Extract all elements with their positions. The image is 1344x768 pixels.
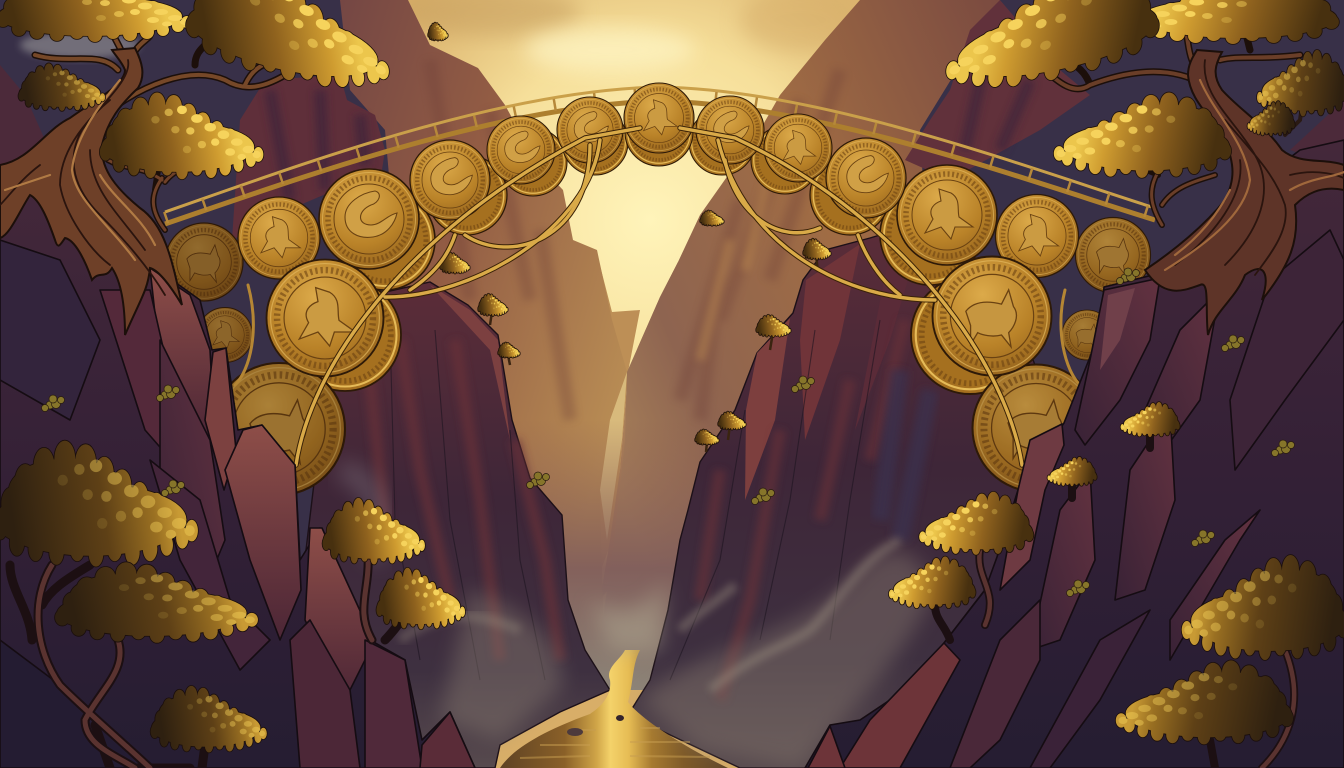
trunk mass [0,48,182,335]
trees: lower right grove [889,268,1344,768]
left foreground cliff [0,170,475,768]
coin: back layer of the bridge [289,98,1029,394]
bridge: top railing [165,87,1155,224]
thin bright slot between the far walls [600,372,627,540]
river [500,650,728,768]
small cliff-side trees and shrubs [428,23,831,505]
background: distant canyon walls [300,0,1000,690]
coin: front layer of the bridge [165,83,1150,495]
right foreground cliff [805,140,1344,768]
trees: lower left grove [0,385,465,768]
trunk mass [1145,50,1344,335]
right mid cliff [628,220,1060,768]
bridge: curved golden arches [235,128,1080,465]
mist [340,470,930,768]
tree: upper right giant with twisted trunk [946,0,1344,335]
left mid cliff [300,282,610,768]
tree: upper left giant with twisted trunk [0,0,389,335]
